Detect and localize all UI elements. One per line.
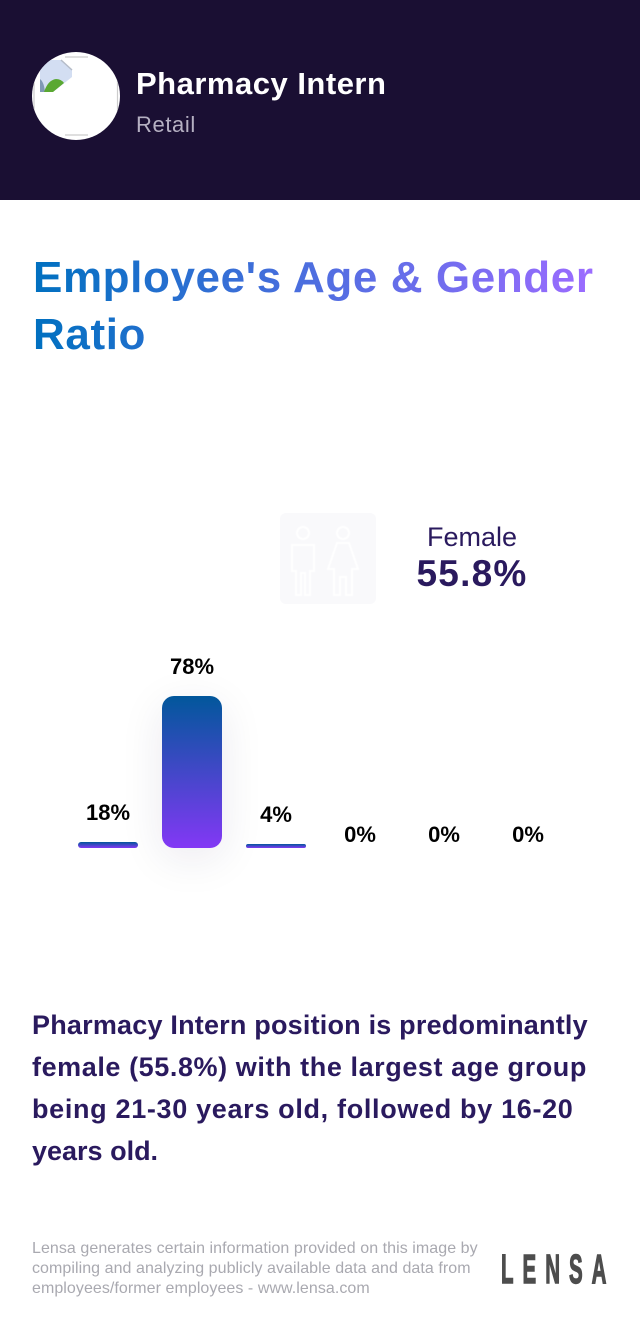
gender icon	[280, 513, 376, 604]
bar 18%: 18%	[86, 800, 130, 825]
job title: Pharmacy Intern	[136, 66, 386, 101]
disclaimer: compiling and analyzing publicly available data and data from	[32, 1260, 471, 1277]
summary text: years old.	[32, 1136, 158, 1166]
disclaimer	[32, 1240, 478, 1297]
gender percentage: 55.8%	[417, 553, 527, 594]
summary text	[32, 1010, 588, 1166]
label 0%: 0%	[512, 822, 544, 847]
summary text: being 21-30 years old, followed by 16-20	[32, 1094, 573, 1124]
bar 18%	[78, 800, 138, 848]
summary text: female (55.8%) with the largest age group	[32, 1052, 587, 1082]
summary text: Pharmacy Intern position is predominantly	[32, 1010, 588, 1040]
header band	[0, 0, 640, 200]
age bar chart	[78, 654, 544, 860]
LENSA logo: LENSA	[501, 1246, 615, 1292]
label 0%: 0%	[428, 822, 460, 847]
disclaimer: employees/former employees - www.lensa.com	[32, 1280, 370, 1297]
section heading: Ratio	[33, 310, 146, 359]
section heading: Employee's Age & Gender	[33, 253, 594, 302]
avatar with broken image icon	[32, 52, 120, 140]
sector: Retail	[136, 112, 196, 137]
section heading	[33, 249, 608, 363]
bar 78%	[156, 654, 228, 860]
disclaimer: Lensa generates certain information provided on this image by	[32, 1240, 478, 1257]
bar 4%	[246, 802, 306, 848]
gender label: Female	[427, 522, 517, 552]
label 0%: 0%	[344, 822, 376, 847]
bar 78%: 78%	[170, 654, 214, 679]
bar 4%: 4%	[260, 802, 292, 827]
